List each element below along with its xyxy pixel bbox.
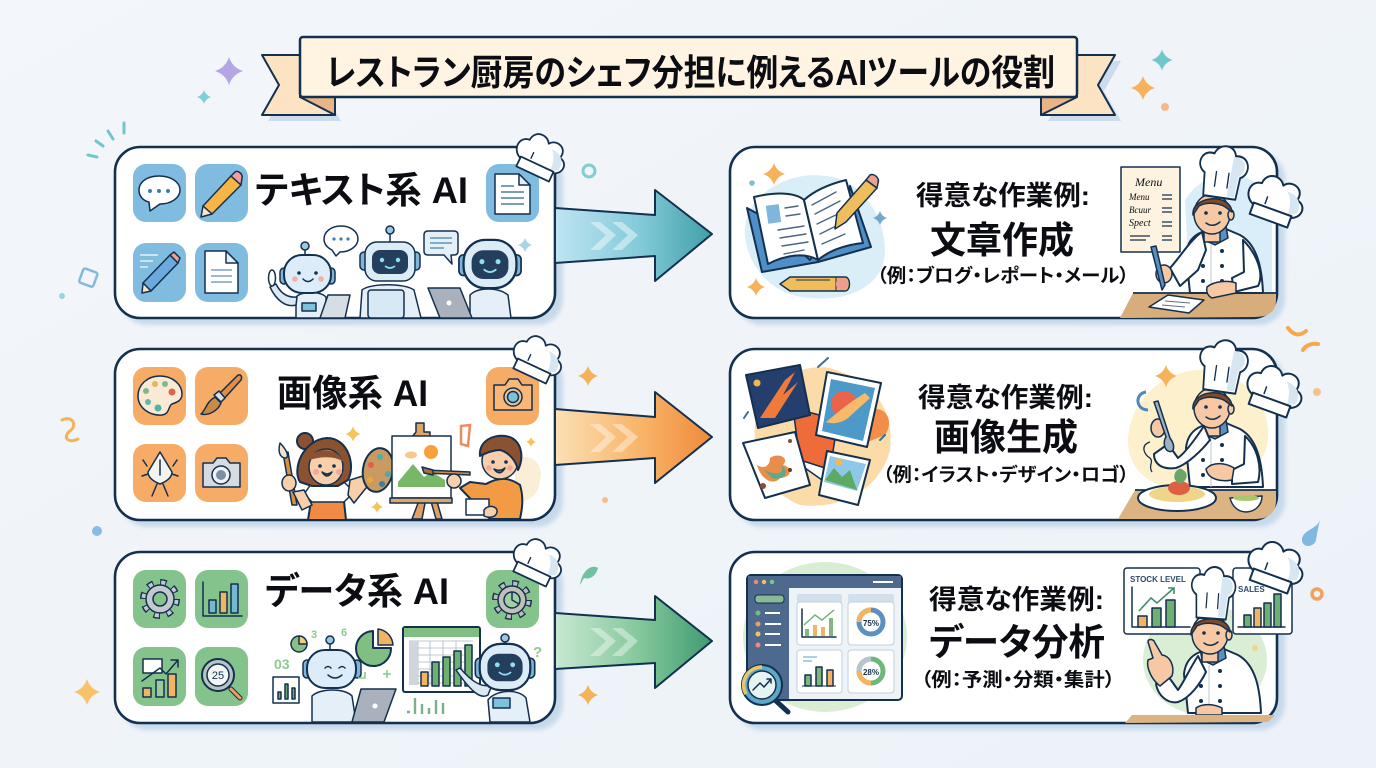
sales board [1233, 568, 1292, 634]
task name: 画像生成 [934, 417, 1078, 458]
arrow: data to analysis [555, 596, 712, 688]
image tile: lightning [746, 365, 810, 428]
image tile: landscape [819, 451, 870, 505]
illustration: image collage [743, 358, 891, 506]
illustration: writing robots [268, 226, 532, 318]
illustration: data robots: 6 [341, 627, 347, 639]
icon: grey camera [195, 444, 248, 502]
heading: データ系 AI [265, 570, 449, 612]
chef hat badge [506, 532, 569, 590]
icon: document [486, 164, 539, 222]
icon: pencil [195, 164, 248, 222]
sales board: SALES [1238, 585, 1265, 594]
chef arms and note [1149, 232, 1260, 313]
illustration: dashboard: 28% [863, 668, 879, 677]
speech bubbles [324, 226, 458, 264]
magnifier [742, 665, 788, 712]
label: 得意な作業例: [916, 181, 1090, 211]
floating chef hat [1240, 360, 1309, 420]
illustration: chef writing menu: Menu [1128, 192, 1150, 202]
heading: テキスト系 AI [255, 170, 468, 211]
icon: blue pencil [133, 243, 186, 302]
icon: gear [133, 570, 186, 628]
icon: bar chart [195, 570, 248, 628]
label: 得意な作業例: [929, 585, 1104, 615]
task name: 文章作成 [930, 220, 1074, 261]
panel: data analysis tasks [730, 536, 1310, 730]
chef hat badge [509, 127, 572, 185]
illustration: data robots: 03 [274, 656, 290, 672]
chef arms [1148, 639, 1222, 715]
panel: text AI [115, 127, 572, 325]
floating chef hat [1241, 170, 1310, 230]
icon: palette [133, 367, 186, 425]
ribbon tails [262, 55, 1121, 121]
pie chart [356, 629, 393, 666]
stock level board: STOCK LEVEL [1130, 575, 1186, 584]
title banner [262, 37, 1121, 121]
robot presenting [456, 634, 535, 722]
illustration: chef writing menu [1120, 143, 1276, 318]
image tile: swirl [743, 432, 810, 498]
illustration: data robots: ? [533, 644, 542, 661]
image tile: brush [816, 372, 881, 447]
illustration: chef writing menu: Menu [1134, 175, 1162, 189]
illustration: dashboard [742, 562, 907, 712]
icon: magnifier [195, 647, 248, 706]
illustration: chef with charts [1124, 565, 1292, 723]
illustration: chef writing menu: Spect [1129, 218, 1151, 229]
spreadsheet chart [403, 627, 480, 692]
robot C [428, 240, 521, 318]
icon: growth chart [133, 647, 186, 706]
panel: image generation tasks [730, 337, 1309, 527]
illustration: chef plating [1118, 337, 1276, 519]
arrow: image to generation [555, 392, 712, 483]
panel: image AI [115, 329, 569, 527]
chef hat badge [506, 329, 569, 387]
examples: （例：イラスト・デザイン・ロゴ） [883, 463, 1129, 486]
illustration: dashboard: 75% [863, 619, 879, 628]
robot B [360, 226, 421, 318]
robot with laptop [303, 636, 396, 722]
icon: page [195, 243, 248, 302]
mini chart [273, 677, 299, 703]
title text: レストラン厨房のシェフ分担に例えるAIツールの役割 [326, 52, 1055, 93]
illustration: data robots: 3 [311, 629, 317, 641]
illustration: artists painting [279, 423, 541, 520]
floating chef hat [1241, 536, 1310, 596]
icon: analysis gear [486, 570, 539, 628]
arrow: text to writing [555, 190, 712, 281]
examples: （例：ブログ・レポート・メール） [877, 264, 1129, 287]
heading: 画像系 AI [277, 373, 428, 414]
illustration: open book and pencil [745, 163, 887, 299]
label: 得意な作業例: [918, 383, 1093, 413]
task name: データ分析 [929, 621, 1105, 663]
panel: data AI [115, 532, 569, 730]
icon: magnifier: 25 [212, 670, 224, 682]
icon: speech bubble [133, 164, 186, 222]
chef arms [1151, 401, 1259, 484]
robot A [268, 242, 350, 318]
panel: writing tasks [730, 143, 1310, 325]
illustration: data robots [273, 627, 542, 722]
mini pie [291, 636, 307, 652]
examples: （例：予測・分類・集計） [921, 668, 1115, 691]
icon: pen tool [133, 444, 186, 502]
stock level board [1124, 568, 1200, 634]
icon: camera [486, 367, 539, 425]
decorative sparkles and dots [59, 50, 1322, 705]
icon: brush [195, 367, 248, 425]
illustration: chef writing menu: Bcuur [1129, 205, 1151, 215]
